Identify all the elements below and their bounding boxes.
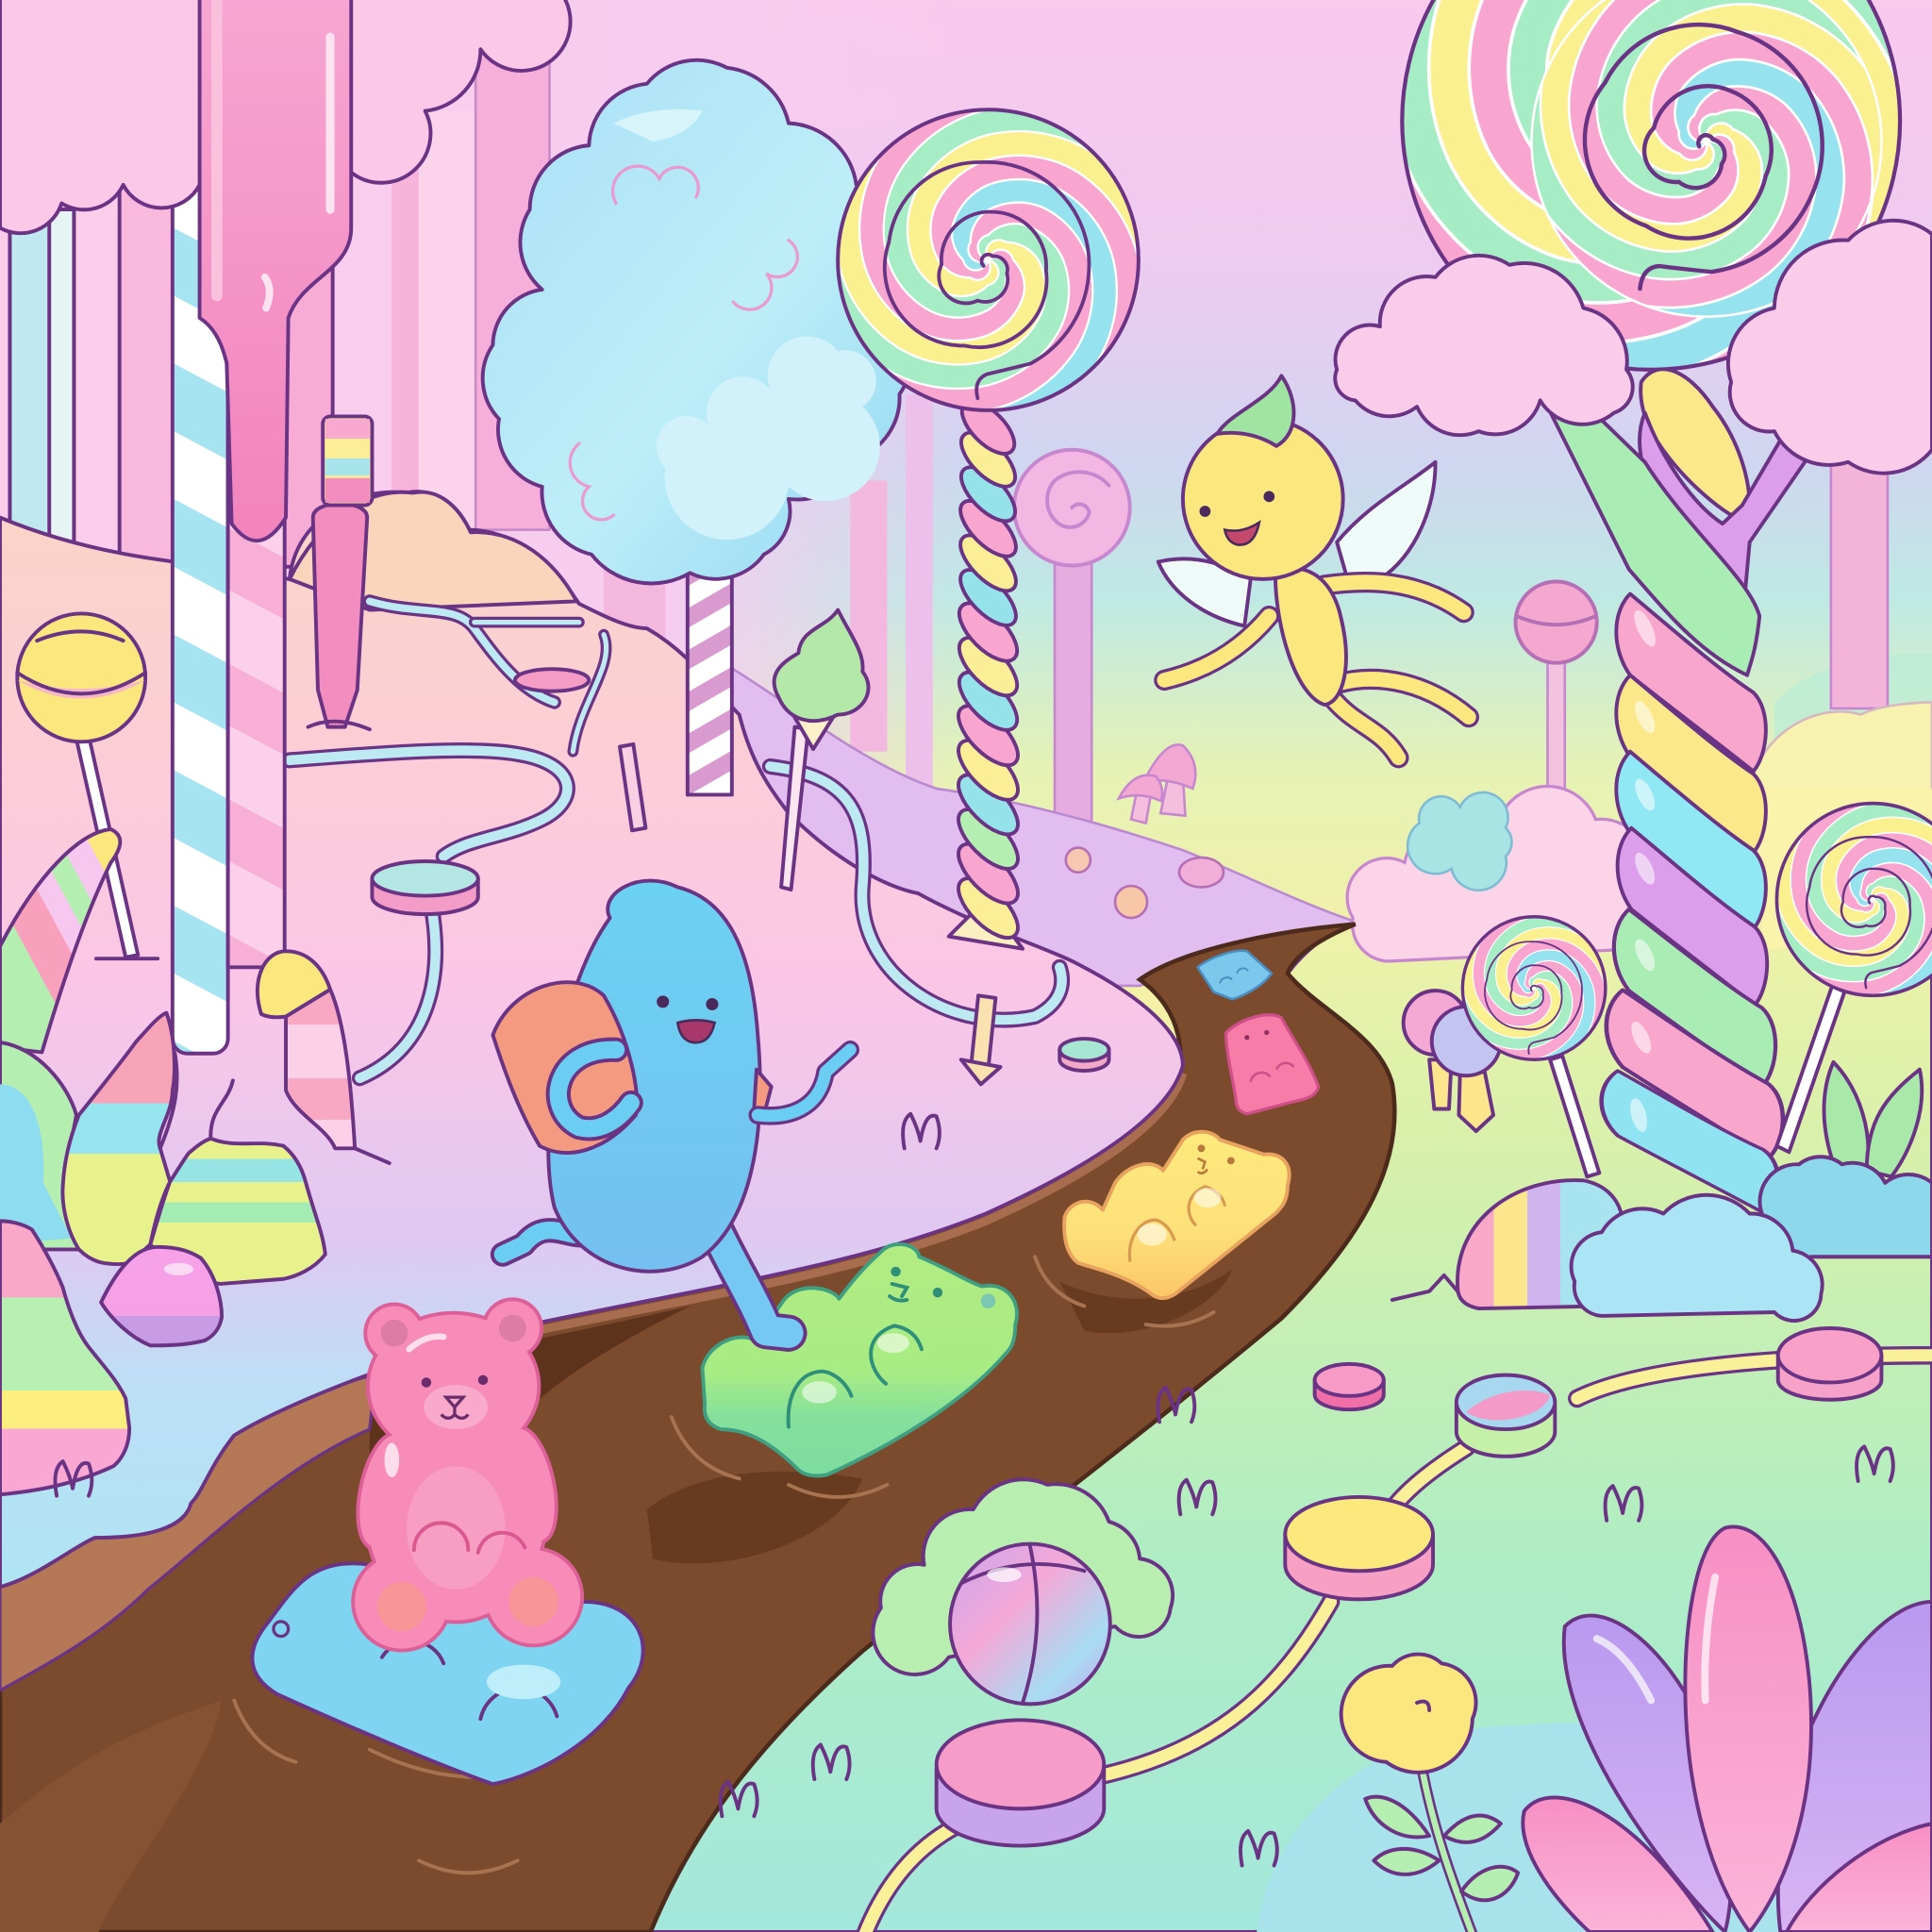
upper peach hill bbox=[290, 492, 576, 610]
upper wing bbox=[1337, 462, 1436, 585]
blue candy trails on the hill bbox=[290, 601, 1062, 1078]
twisted lollipop stem bbox=[949, 392, 1027, 949]
giant twisted candy trunk bbox=[1541, 369, 1826, 1212]
face bbox=[657, 995, 718, 1042]
small pink disc bbox=[1315, 1364, 1384, 1409]
lower wing bbox=[1158, 558, 1251, 626]
background pink lollipop bbox=[1014, 450, 1130, 850]
chocolate river bbox=[0, 924, 1394, 1932]
front leg bbox=[708, 1214, 789, 1333]
yellow candy road bbox=[862, 1356, 1932, 1932]
pink gumdrop bbox=[101, 1247, 222, 1345]
yellow gummy bear bbox=[1064, 1132, 1290, 1298]
stepping disc far right bbox=[1778, 1328, 1881, 1400]
background mushroom candies bbox=[1404, 991, 1501, 1131]
candy sticks planted in ground bbox=[620, 744, 1001, 1084]
glossy highlights bbox=[1627, 608, 1660, 1134]
big flower petals bbox=[1523, 1526, 1932, 1932]
small spiral lollipop bbox=[1441, 894, 1628, 1176]
green gummy bear bbox=[702, 1244, 1017, 1475]
face bbox=[1200, 491, 1274, 545]
background candy columns bbox=[9, 37, 933, 801]
striped finger candy bbox=[258, 951, 390, 1163]
right meadow ground bbox=[616, 887, 1932, 1932]
icing drips under pole bbox=[160, 1054, 233, 1148]
giant lollipop top right bbox=[1196, 0, 1932, 575]
limbs bbox=[1164, 582, 1469, 758]
left teal candy mound bbox=[0, 1042, 79, 1249]
cotton candy tree bbox=[483, 60, 910, 794]
backpack right strap bbox=[754, 1070, 772, 1115]
leaf hair bbox=[1217, 375, 1293, 446]
green bush with candy ball bbox=[873, 1479, 1173, 1704]
grass tufts bbox=[721, 1388, 1893, 1865]
pencil candy bbox=[308, 416, 372, 729]
crack line near shell bbox=[1392, 1275, 1457, 1300]
background hills right bbox=[1750, 462, 1932, 961]
striped cone candy bbox=[62, 1013, 175, 1264]
stepping disc pink and purple bbox=[937, 1720, 1104, 1846]
green leaves plant bbox=[1824, 1062, 1922, 1176]
blue candy bush far right bbox=[1759, 1157, 1932, 1259]
head bbox=[1183, 419, 1343, 579]
stepping disc upper bbox=[1457, 1375, 1555, 1457]
top left pink cloud bbox=[0, 0, 571, 233]
tuft on land bbox=[903, 1114, 940, 1148]
upper purple twist and branch bbox=[1640, 413, 1826, 610]
backpack bbox=[492, 982, 637, 1153]
stepping disc on hill bbox=[372, 861, 478, 914]
giant lollipop inner swirl bbox=[1412, 0, 1932, 436]
rainbow cone candy bbox=[0, 829, 120, 1052]
far pink and yellow clouds bbox=[1347, 787, 1932, 961]
body bbox=[548, 881, 760, 1272]
brown crust on cliff bbox=[0, 1374, 375, 1690]
green band and left branch bbox=[1541, 382, 1759, 675]
light blue candy cloud bbox=[1572, 1195, 1823, 1321]
small blue gummy bear bbox=[1198, 951, 1272, 999]
left arm and strap bbox=[558, 1050, 631, 1128]
background mushrooms bbox=[1119, 744, 1195, 823]
background small lollipop bbox=[1516, 581, 1597, 832]
tuft on cliff bbox=[55, 1461, 92, 1496]
striped shell candy bbox=[1457, 1180, 1624, 1308]
small yellow flower bbox=[1341, 1655, 1518, 1932]
torso bbox=[1275, 569, 1346, 705]
yellow flying fairy character bbox=[1158, 375, 1469, 758]
green soft serve candy on stick bbox=[774, 610, 869, 890]
right arm bbox=[758, 1050, 850, 1116]
striped candy pole bbox=[173, 185, 228, 1054]
left candy land hill bbox=[0, 491, 1183, 1587]
pink syrup drip column bbox=[200, 0, 351, 541]
upper yellow twist bbox=[1641, 369, 1749, 524]
left backdrop haze bbox=[0, 0, 961, 986]
blue gummy base bbox=[252, 1563, 643, 1784]
blue walking character bbox=[492, 881, 850, 1333]
pink gummy bear bbox=[351, 1301, 580, 1649]
striped gumdrop candy bbox=[150, 1139, 325, 1284]
back leg bbox=[503, 1230, 591, 1255]
pink cloud far right bbox=[1728, 221, 1932, 474]
pink cloud right of lollipop bbox=[1335, 256, 1633, 435]
pink striped pole bbox=[228, 295, 285, 967]
right spiral lollipop bbox=[1747, 774, 1932, 1152]
striped egg candy bbox=[0, 1221, 129, 1494]
shoreline rim bbox=[370, 1074, 1183, 1382]
small disc by the trail bbox=[1059, 1039, 1109, 1071]
purple hill bbox=[727, 665, 1356, 986]
spiral lollipop center bbox=[791, 62, 1186, 458]
yellow lollipop left bbox=[17, 613, 158, 958]
twist bands bbox=[1602, 594, 1783, 1212]
pale blue-green hill on lower right bbox=[1257, 1723, 1932, 1932]
small pink gummy bear bbox=[1226, 1015, 1319, 1114]
stepping disc yellow bbox=[1285, 1497, 1433, 1599]
